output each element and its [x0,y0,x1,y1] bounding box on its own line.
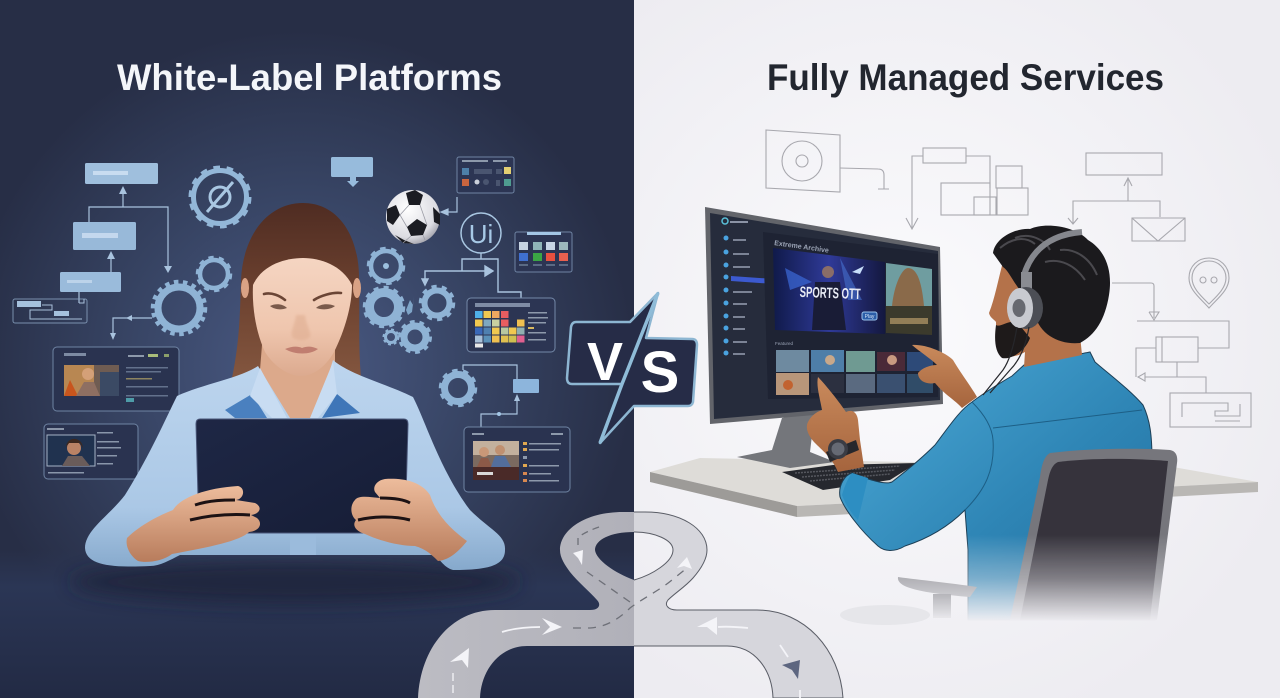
nose [292,315,310,340]
icon: lower right gear [440,370,476,406]
eyebrows [264,293,341,300]
monitor [705,207,943,424]
line diagram: location pin [1189,258,1229,308]
VS badge [567,293,697,443]
box: middle process [73,222,136,250]
shirt seams [965,402,1142,510]
thumbnail: smiling presenter [47,435,95,466]
figure: desk [650,458,1258,517]
neck [258,345,335,425]
screen heading: Extreme Archive [774,240,829,255]
panel: white-label background [0,0,634,698]
screen card: colour grid calendar [467,298,555,352]
icon: soccer ball [386,190,440,244]
neck and face [989,262,1082,367]
content panel [763,232,938,399]
hair [993,226,1110,343]
monitor stand [737,410,835,468]
road: winding path left half [418,512,634,698]
screen card: video with comments [464,427,570,492]
screen card: video preview wide [53,347,179,411]
figure: woman with tablet [85,203,505,570]
road: winding path right half [634,512,844,698]
box: lower process [60,272,121,292]
ears [241,278,361,298]
icon: small gear [198,258,230,290]
icon: UI badge [461,213,501,253]
seat shadow [840,605,930,625]
chair back [1010,449,1177,620]
screen card: colour swatches [515,232,572,272]
line diagram: boxes network [906,148,1028,229]
table surface under tablet user [0,550,634,698]
front hand pointing [807,377,864,472]
torso and arm in blue shirt [840,352,1155,620]
road markings and arrows [450,527,800,698]
screen card: app icons [457,157,514,193]
VS badge: S [641,340,679,405]
box: top process [85,163,158,184]
side thumbnails [886,263,932,335]
small process box with connectors [463,365,539,427]
icon: gear with slash [190,168,250,226]
left hand [127,486,260,562]
icon: UI badge: Ui [469,219,493,249]
shirt [85,360,505,570]
lips [285,347,318,354]
line diagram: lower right flow [1112,283,1251,427]
mini flow panel [13,299,87,323]
screen card: video preview small [44,424,138,479]
line diagram: disc panel [766,130,889,192]
connector lines from UI badge [422,253,521,298]
thumbnail grid [776,350,933,395]
shirt placket [290,535,316,555]
hero banner: SPORTS OTT [773,248,885,334]
eyes [270,304,335,309]
wristwatch [826,439,859,462]
chair armrest [898,577,977,618]
rear hand [912,345,977,408]
play button: Play [865,314,875,320]
hair part [302,209,304,258]
section label: Featured [775,341,794,346]
keyboard [782,463,917,490]
beard [995,322,1030,358]
figure: seated man [807,226,1177,620]
line diagram: top right flow and envelope [1068,153,1185,241]
collar [225,362,360,418]
cuff of sleeve [842,473,868,520]
face [253,258,352,376]
table shadow [70,560,520,604]
hero banner: SPORTS OTT: SPORTS OTT [799,284,861,303]
hair [232,203,361,378]
headphones [983,232,1082,395]
VS badge: V [587,332,623,392]
icon: large gear [153,282,205,334]
sidebar [722,218,774,356]
arrow: card to ball [441,197,457,215]
right hand [351,479,467,561]
thumbnail: two people [473,441,519,480]
gears cluster [364,248,454,352]
thumbnail: portrait [64,365,119,396]
heading: Fully Managed Services: Fully Managed Services [767,57,1164,98]
heading: White-Label Platforms: White-Label Platforms [117,57,502,98]
panel: managed services background [634,0,1280,698]
icon: callout box [331,157,373,187]
tablet [196,419,408,533]
flow diagram: left stacked boxes [13,163,172,340]
